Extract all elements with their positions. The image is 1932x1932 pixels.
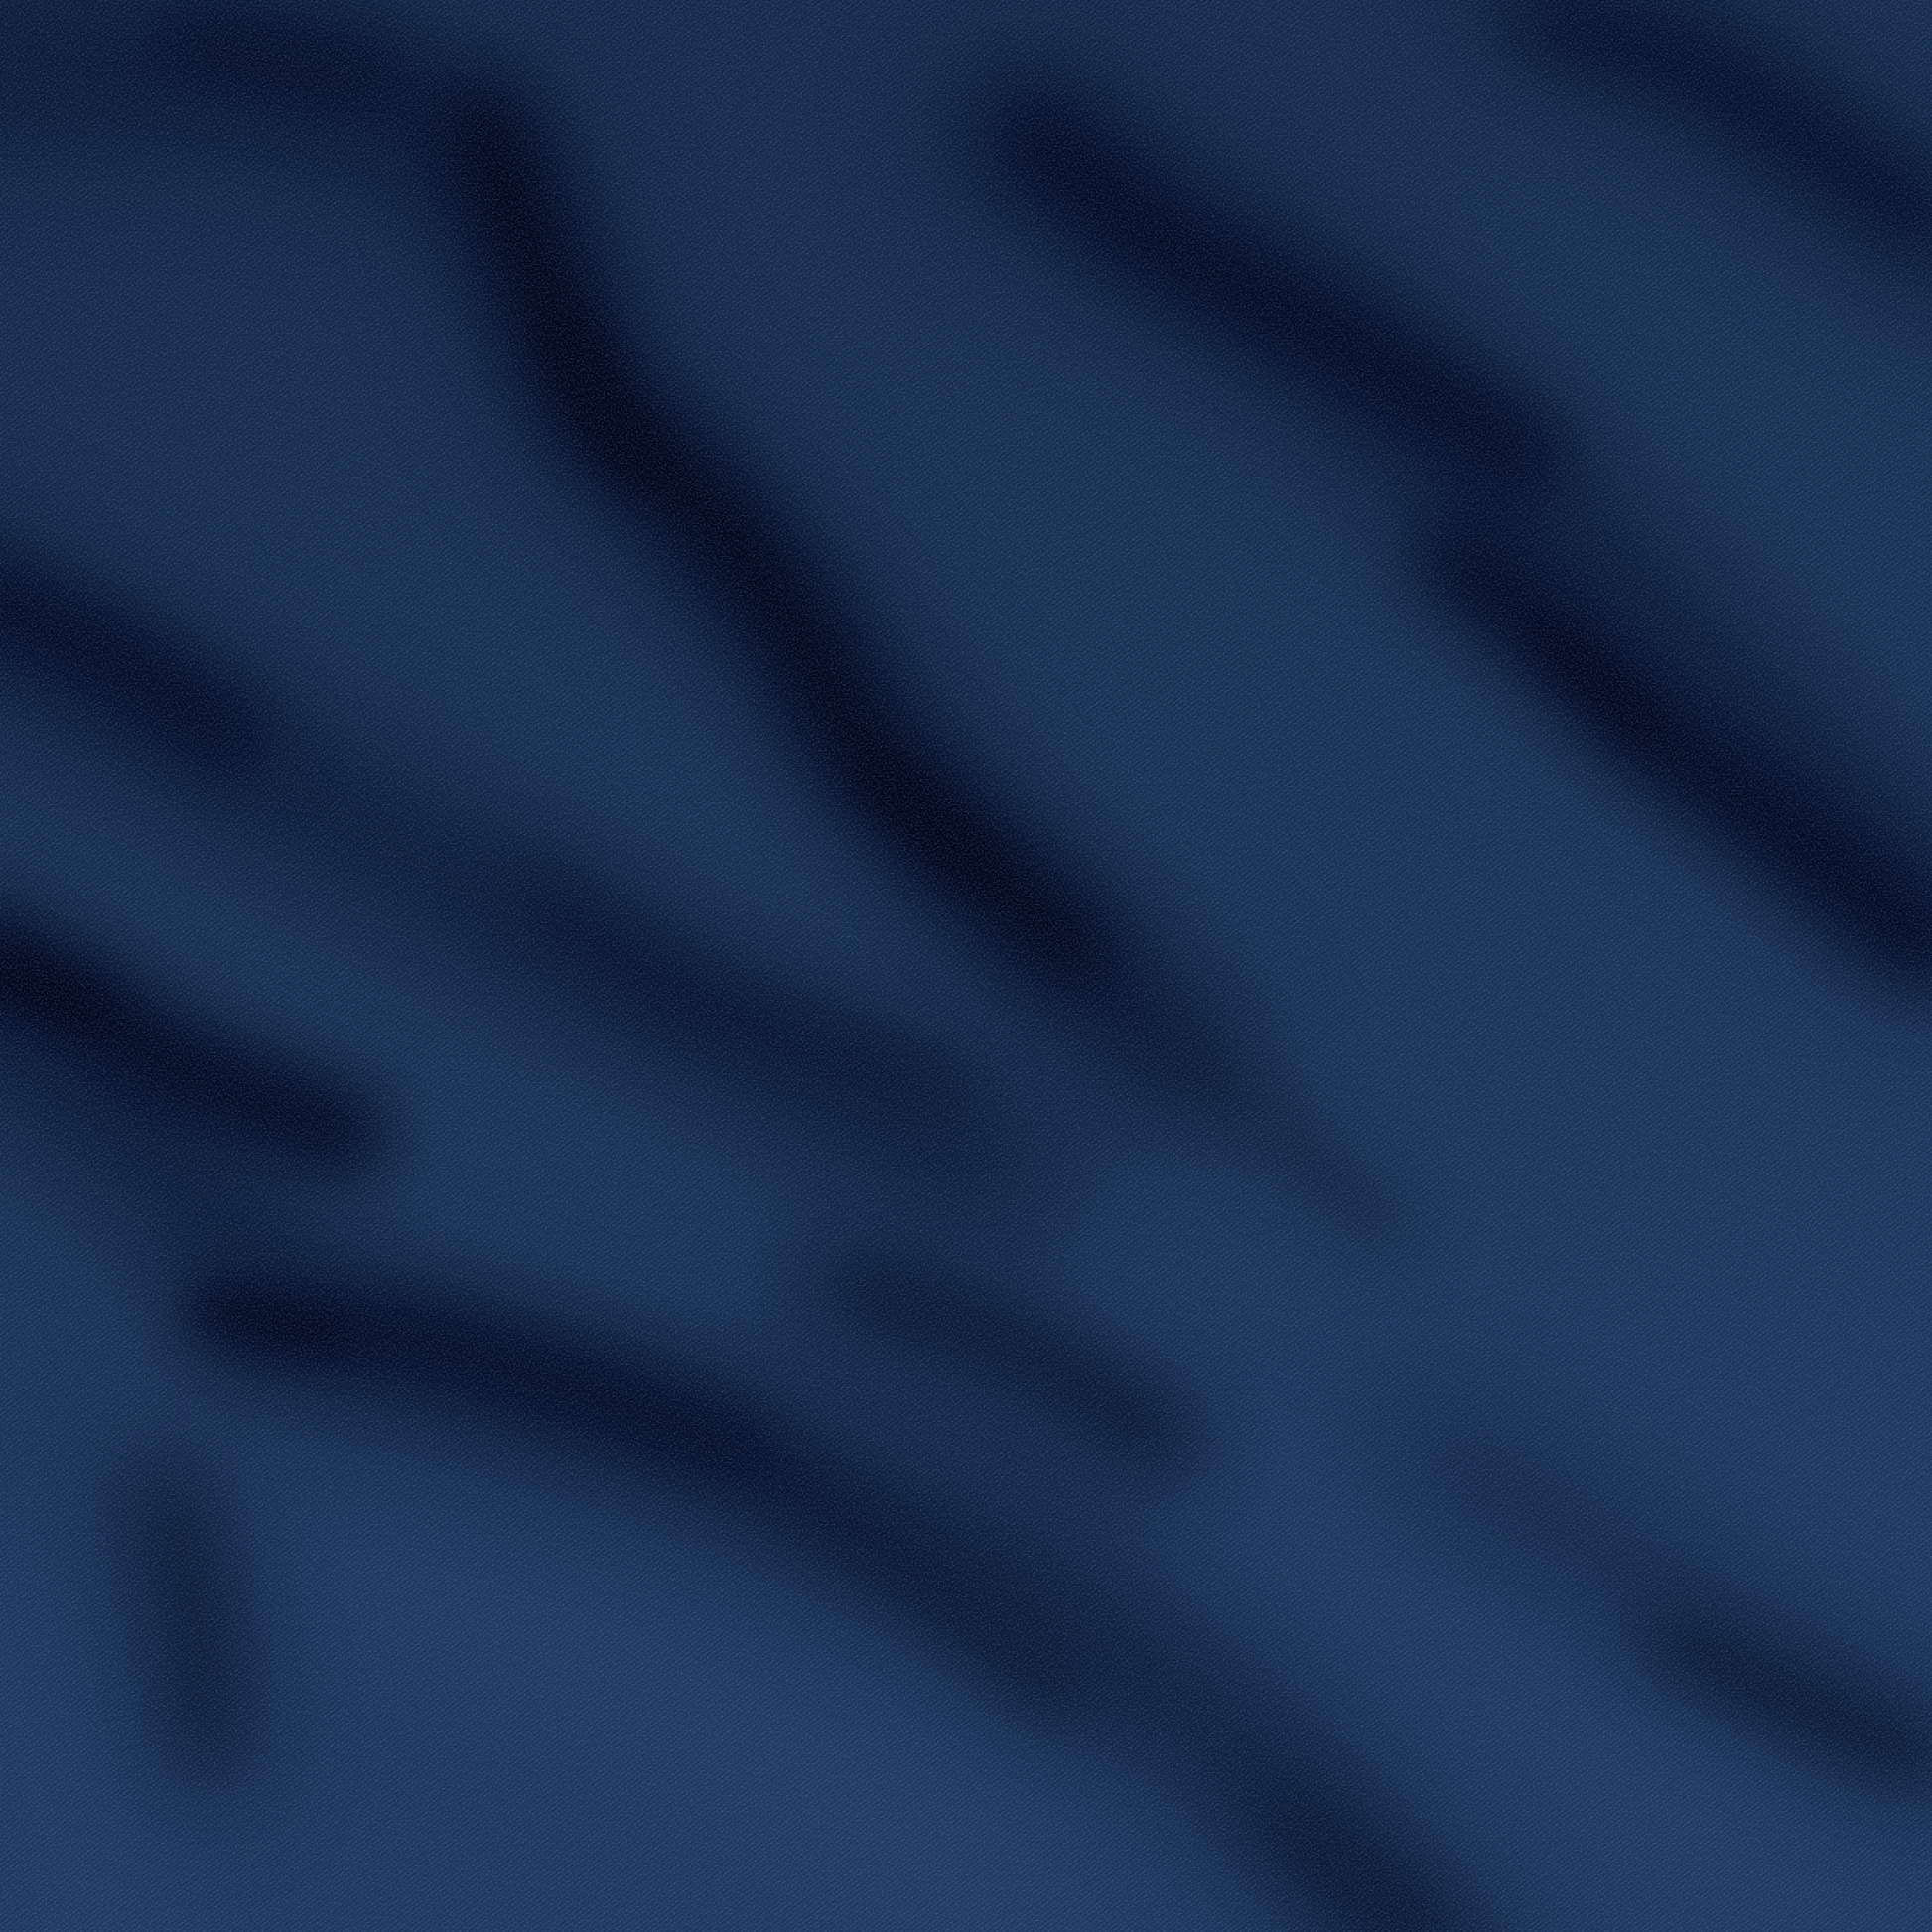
deep fold: central diagonal [185,37,1392,1232]
deep fold: left side [0,592,949,1134]
lighter fold highlights [25,1453,1787,1932]
deep fold: upper right [1035,25,1932,949]
crisp crease lines [0,333,1651,1337]
deep fold: lower band [167,1282,1932,1932]
